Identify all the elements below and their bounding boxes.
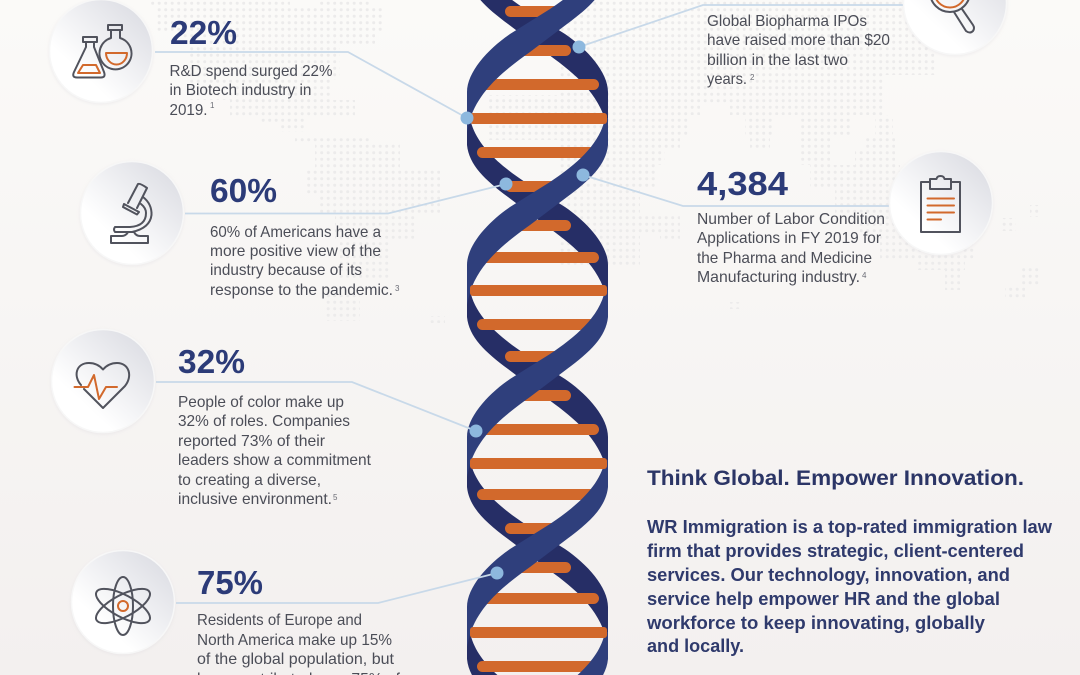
stat: 60% — [210, 172, 400, 299]
dotted world map — [65, 0, 1040, 323]
stat: 22%: in Biotech industry in — [170, 82, 312, 99]
stat: 22%: R&D spend surged 22% — [170, 63, 332, 80]
stat: 32%: 5 — [333, 493, 338, 502]
stat: 4,384: Number of Labor Condition — [697, 211, 885, 228]
icon: atom — [72, 550, 174, 654]
stat: Global Biopharma IPOs: have raised more than $20 — [707, 32, 890, 49]
stat: 22% — [170, 14, 332, 119]
stat: 60%: response to the pandemic. — [210, 282, 393, 299]
stat: 4,384: Applications in FY 2019 for — [697, 230, 881, 247]
closing statement — [646, 467, 1053, 656]
stat: 32% — [178, 343, 372, 508]
closing statement: and locally. — [647, 636, 744, 656]
stat: 32%: People of color make up — [178, 394, 344, 411]
stat: 60%: more positive view of the — [210, 243, 381, 260]
stat: 60%: industry because of its — [210, 262, 362, 279]
stat: 4,384: 4,384 — [697, 165, 789, 202]
stat: Global Biopharma IPOs — [707, 13, 890, 88]
stat: 60%: 60% of Americans have a — [210, 224, 381, 241]
closing statement: firm that provides strategic, client-centered — [647, 541, 1024, 561]
icon: microscope — [80, 162, 184, 264]
stat: 75%: North America make up 15% — [197, 632, 392, 649]
stat: 22%: 2019. — [170, 102, 208, 119]
stat: 75%: Residents of Europe and — [197, 612, 362, 629]
closing statement: workforce to keep innovating, globally — [646, 613, 985, 633]
icon: heart with pulse — [52, 330, 154, 432]
closing statement: Think Global. Empower Innovation. — [647, 467, 1024, 490]
stat: 22%: 22% — [170, 14, 237, 51]
stat: 32%: to creating a diverse, — [178, 472, 321, 489]
closing statement: WR Immigration is a top-rated immigration law — [647, 517, 1053, 537]
centre rungs — [470, 113, 607, 638]
closing statement: services. Our technology, innovation, and — [647, 565, 1010, 585]
front strands — [467, 0, 608, 675]
stat: 32%: 32% — [178, 343, 245, 380]
stat: 32%: reported 73% of their — [178, 433, 325, 450]
stat: Global Biopharma IPOs: Global Biopharma IPOs — [707, 13, 867, 30]
stat: 75%: 75% — [197, 564, 263, 601]
connector dots — [460, 40, 590, 580]
stat: 32%: 32% of roles. Companies — [178, 413, 350, 430]
stat: Global Biopharma IPOs: years. — [707, 71, 747, 88]
stat: Global Biopharma IPOs: billion in the last two — [707, 52, 848, 69]
icon: clipboard — [890, 152, 992, 254]
stat: 22%: 1 — [210, 101, 215, 110]
stat: 60%: 3 — [395, 284, 400, 293]
stat: 4,384: 4 — [862, 271, 867, 280]
stat: 32%: leaders show a commitment — [178, 452, 372, 469]
closing statement: service help empower HR and the global — [647, 589, 1000, 609]
back strands — [467, 0, 608, 675]
stat: 32%: inclusive environment. — [178, 491, 332, 508]
DNA double helix — [467, 0, 608, 675]
stat: 75% — [197, 564, 401, 675]
stat: 4,384 — [697, 165, 885, 286]
connector lines — [155, 5, 905, 603]
icon: magnifying glass — [904, 0, 1006, 54]
stat: 60%: 60% — [210, 172, 277, 209]
stat: 4,384: the Pharma and Medicine — [697, 250, 872, 267]
stat: 4,384: Manufacturing industry. — [697, 269, 860, 286]
orange rungs — [477, 6, 599, 672]
stat: 75%: of the global population, but — [197, 651, 395, 668]
icon: flasks — [50, 0, 152, 102]
stat: Global Biopharma IPOs: 2 — [750, 73, 755, 82]
